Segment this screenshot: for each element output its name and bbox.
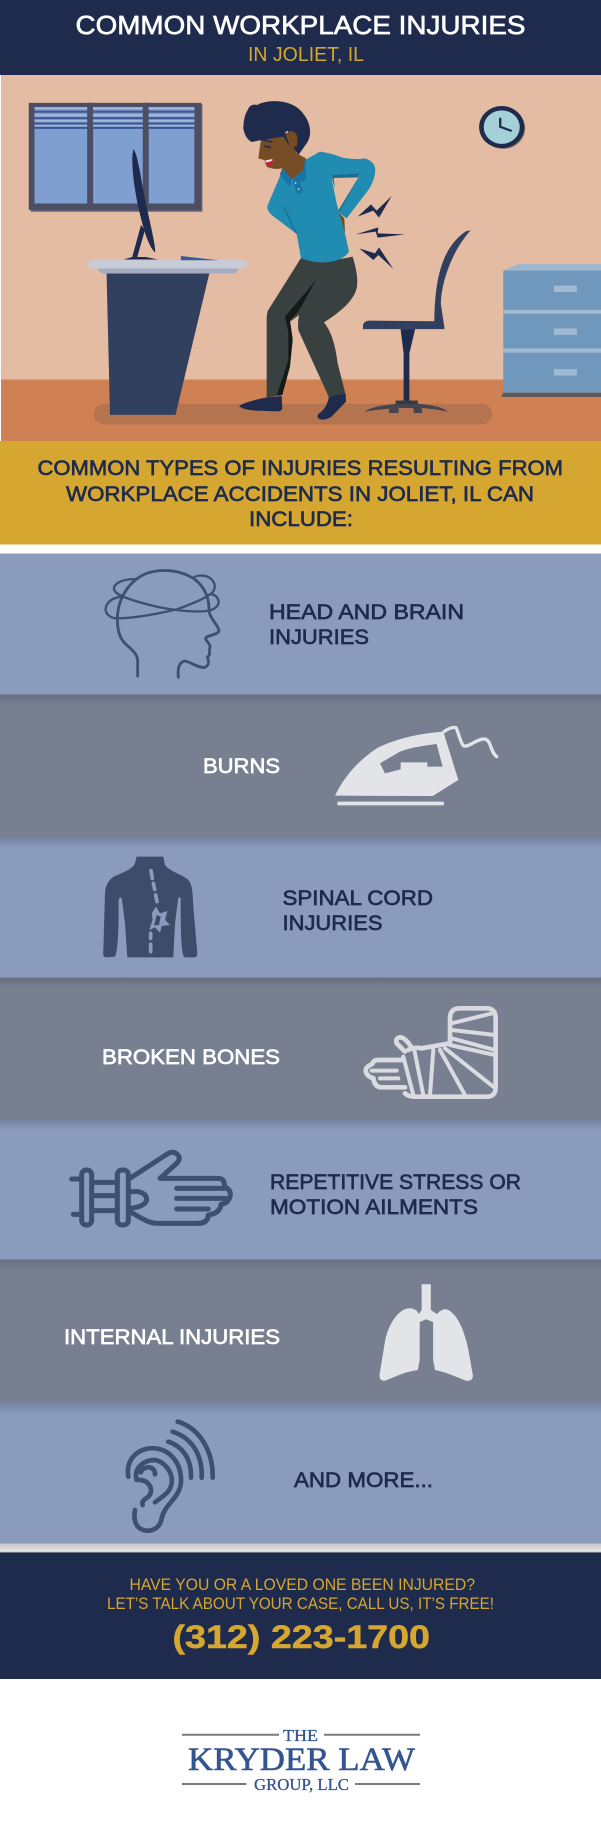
header panel: [0, 0, 601, 75]
panel: repetitive stress: [0, 1119, 601, 1260]
wall clock: [479, 106, 525, 149]
call to action text: [107, 1575, 494, 1613]
panel: call to action: [0, 1552, 601, 1679]
phone number: (312) 223-1700: [172, 1619, 430, 1655]
call to action text: LET’S TALK ABOUT YOUR CASE, CALL US, IT’S FREE!: [107, 1594, 494, 1613]
icon: clothes iron: [335, 727, 497, 805]
logo: GROUP, LLC: [254, 1775, 349, 1794]
label: INJURIES: [269, 626, 369, 649]
office chair: [363, 230, 471, 413]
label: [270, 1171, 521, 1219]
subtitle: IN JOLIET, IL: [248, 44, 364, 66]
label: MOTION AILMENTS: [270, 1196, 478, 1219]
panel: intro heading: COMMON TYPES OF INJURIES RESULTING FROM: [38, 457, 563, 480]
panel: internal injuries: [0, 1260, 601, 1401]
label: SPINAL CORD: [282, 887, 433, 910]
label: REPETITIVE STRESS OR: [270, 1171, 521, 1194]
hair: [243, 101, 310, 155]
logo: KRYDER LAW: [188, 1742, 416, 1778]
icon: back with spine: [103, 857, 197, 957]
logo: [182, 1726, 420, 1794]
label: [282, 887, 433, 935]
panel: intro heading: [0, 441, 601, 544]
panel: spinal cord injuries: [0, 836, 601, 978]
icon: arm in cast: [366, 1008, 496, 1097]
pain bolts: [356, 196, 405, 269]
label: AND MORE...: [294, 1469, 433, 1492]
panel: office illustration: [1, 75, 601, 442]
panel: burns: [0, 694, 601, 836]
title: COMMON WORKPLACE INJURIES: [76, 10, 526, 40]
label: BURNS: [203, 755, 280, 778]
label: HEAD AND BRAIN: [269, 601, 464, 624]
panel: head and brain injuries: [0, 554, 601, 694]
collar: [280, 159, 306, 187]
face: [258, 132, 306, 179]
label: BROKEN BONES: [102, 1046, 280, 1069]
panel: and more: [0, 1401, 601, 1544]
person holding back: [239, 101, 405, 420]
icon: lungs: [379, 1284, 473, 1381]
computer monitor: [123, 149, 158, 260]
logo: THE: [283, 1726, 318, 1745]
panel: intro heading: INCLUDE:: [249, 508, 353, 531]
icon: ear with sound waves: [128, 1422, 213, 1531]
panel: intro heading: WORKPLACE ACCIDENTS IN JOLIET, IL CAN: [66, 483, 534, 506]
call to action text: HAVE YOU OR A LOVED ONE BEEN INJURED?: [130, 1575, 475, 1594]
legs and shoes: [239, 257, 357, 420]
rug: [94, 404, 492, 424]
icon: head with orbits: [106, 571, 219, 677]
desk: [88, 256, 247, 415]
torso, head and pain marks: [243, 101, 405, 269]
window: [29, 103, 202, 212]
filing cabinet: [501, 264, 601, 397]
label: INTERNAL INJURIES: [64, 1326, 280, 1349]
label: [269, 601, 464, 649]
panel: broken bones: [0, 978, 601, 1119]
icon: hand in splint: [72, 1152, 230, 1225]
keyboard: [181, 256, 218, 260]
label: INJURIES: [282, 912, 382, 935]
